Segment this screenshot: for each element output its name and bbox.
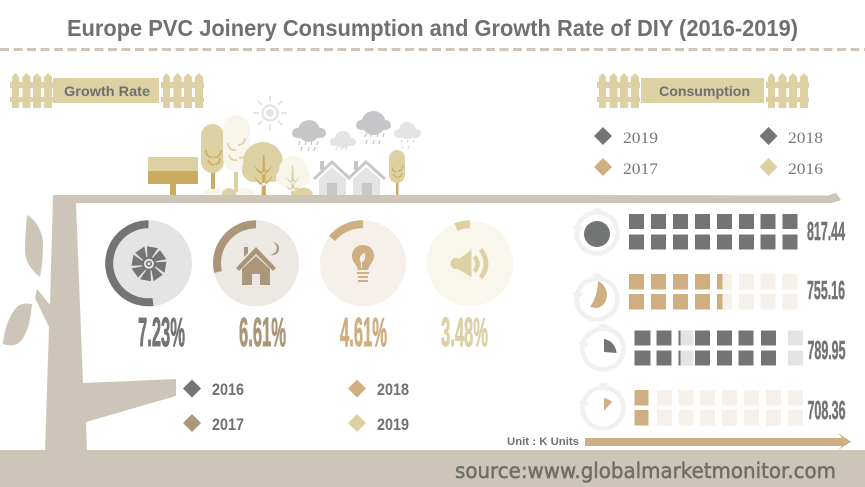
icon: small tree: [389, 150, 405, 195]
chart: 4.61% growth ring: 4.61%: [340, 309, 387, 355]
icon: upper leaf: [25, 215, 43, 277]
icon: stopwatch quarter: [580, 326, 624, 370]
consumption legend: [594, 127, 823, 178]
arrow: unit scale: [585, 433, 851, 450]
illustration: tree trunk and branch: [35, 193, 841, 452]
consumption legend: 2019: [623, 130, 658, 147]
icon: stopwatch sliver: [580, 384, 624, 428]
chart: 4.61% growth ring: [320, 220, 406, 355]
icon: stopwatch full: [574, 210, 618, 254]
panel: consumption heading: Consumption: [659, 83, 750, 99]
chart: 3.48% growth ring: [427, 220, 513, 355]
growth rate legend: 2018: [377, 380, 409, 399]
growth rate legend: [183, 380, 409, 434]
icon: speaker: [450, 248, 488, 279]
illustration: landscape scene: [148, 96, 421, 202]
chart: consumption 755.16: [574, 274, 845, 320]
chart: 6.61% growth ring: 6.61%: [239, 309, 286, 355]
text: 7.23%: [138, 309, 185, 355]
ground band: [0, 450, 865, 487]
panel: growth rate heading: [10, 73, 204, 108]
icon: pale bushes: [203, 188, 313, 202]
chart: 3.48% growth ring: 3.48%: [441, 309, 488, 355]
chart: consumption 817.44: [574, 210, 845, 254]
title: Europe PVC Joinery Consumption and Growth Rate of DIY (2016-2019): [67, 15, 798, 41]
icon: clouds and rain: [292, 111, 421, 151]
source line: source:www.globalmarketmonitor.com: [455, 459, 836, 483]
icon: pale tree: [223, 115, 250, 192]
icon: tall tree: [201, 124, 224, 189]
icon: light bulb: [352, 245, 374, 282]
icon: lower leaf: [3, 304, 32, 345]
chart: 7.23% growth ring: [106, 220, 192, 355]
icon: sun: [253, 96, 287, 130]
chart: consumption 789.95: [580, 326, 846, 370]
icon: stopwatch two thirds: [574, 276, 618, 320]
consumption legend: 2018: [788, 130, 823, 147]
panel: growth rate heading: Growth Rate: [64, 83, 150, 99]
growth rate legend: 2016: [212, 380, 244, 399]
icon: signboard: [148, 157, 198, 195]
growth rate legend: 2017: [212, 415, 244, 434]
chart: 6.61% growth ring: [213, 220, 299, 355]
icon: fan: [130, 245, 168, 283]
unit label: Unit : K Units: [507, 436, 579, 448]
icon: houses: [314, 161, 385, 195]
icon: pale round tree: [276, 156, 310, 195]
icon: round tree: [242, 142, 284, 195]
consumption legend: 2017: [623, 161, 658, 178]
panel: consumption heading: [597, 73, 809, 108]
chart: consumption 708.36: [580, 384, 846, 428]
consumption legend: 2016: [788, 161, 823, 178]
growth rate legend: 2019: [377, 415, 409, 434]
icon: house and moon: [236, 242, 279, 285]
